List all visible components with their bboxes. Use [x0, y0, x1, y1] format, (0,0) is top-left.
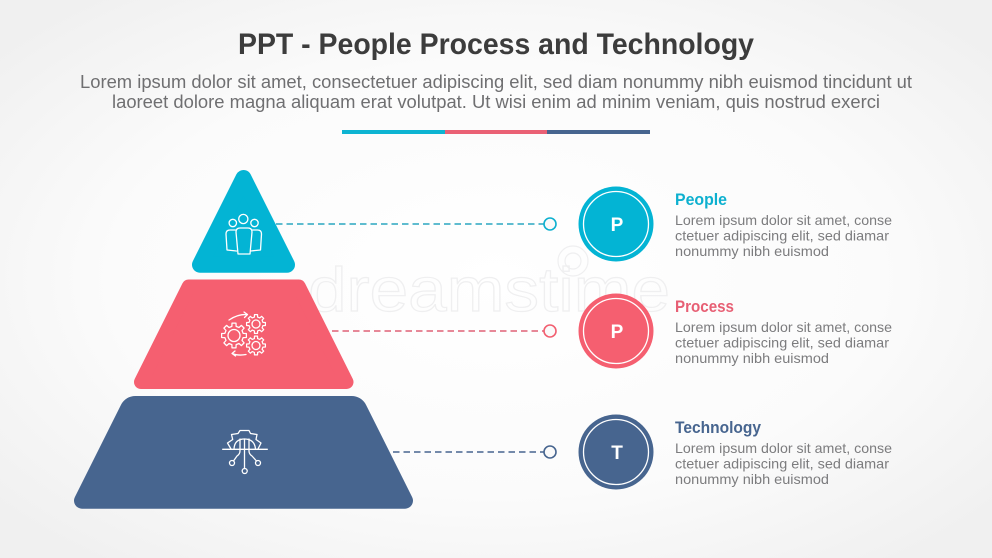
text block: people: Lorem ipsum dolor sit amet, conse — [675, 212, 892, 228]
pyramid tier: people — [200, 178, 287, 265]
watermark: dreamstime — [308, 256, 670, 325]
text block: people: People — [675, 190, 727, 209]
icon: technology gear and circuit — [223, 430, 267, 474]
pyramid tier: technology — [74, 396, 413, 509]
text block: technology: Lorem ipsum dolor sit amet, conse — [675, 440, 892, 456]
text block: technology — [675, 418, 892, 487]
text block: technology: Technology — [675, 418, 761, 437]
icon: people — [226, 214, 262, 254]
intro text: Lorem ipsum dolor sit amet, consectetuer adipiscing elit, sed diam nonummy nibh euismod tincidunt ut — [80, 72, 912, 92]
title: PPT - People Process and Technology — [238, 28, 754, 61]
text block: process: ctetuer adipiscing elit, sed diamar — [675, 334, 889, 350]
badge: technology — [578, 414, 654, 490]
connector: people — [276, 218, 556, 230]
pyramid tier: process — [141, 286, 346, 382]
text block: technology: nonummy nibh euismod — [675, 471, 829, 487]
text block: people: ctetuer adipiscing elit, sed diamar — [675, 228, 889, 244]
connector: process — [332, 325, 556, 337]
text block: people: nonummy nibh euismod — [675, 243, 829, 259]
badge: people — [578, 186, 654, 262]
intro text: laoreet dolore magna aliquam erat volutpat. Ut wisi enim ad minim veniam, quis nostrud exerci — [112, 92, 880, 112]
tricolor divider — [342, 130, 650, 134]
text block: technology: ctetuer adipiscing elit, sed diamar — [675, 456, 889, 472]
intro text — [80, 72, 912, 112]
badge: technology: T — [611, 443, 623, 464]
badge: process: P — [611, 322, 624, 343]
connector: technology — [393, 446, 556, 458]
icon: process gears — [222, 312, 265, 356]
badge: people: P — [611, 215, 624, 236]
text block: process — [675, 297, 892, 366]
text block: process: nonummy nibh euismod — [675, 350, 829, 366]
text block: process: Lorem ipsum dolor sit amet, conse — [675, 319, 892, 335]
text block: people — [675, 190, 892, 259]
badge: process — [578, 294, 654, 368]
text block: process: Process — [675, 297, 734, 316]
